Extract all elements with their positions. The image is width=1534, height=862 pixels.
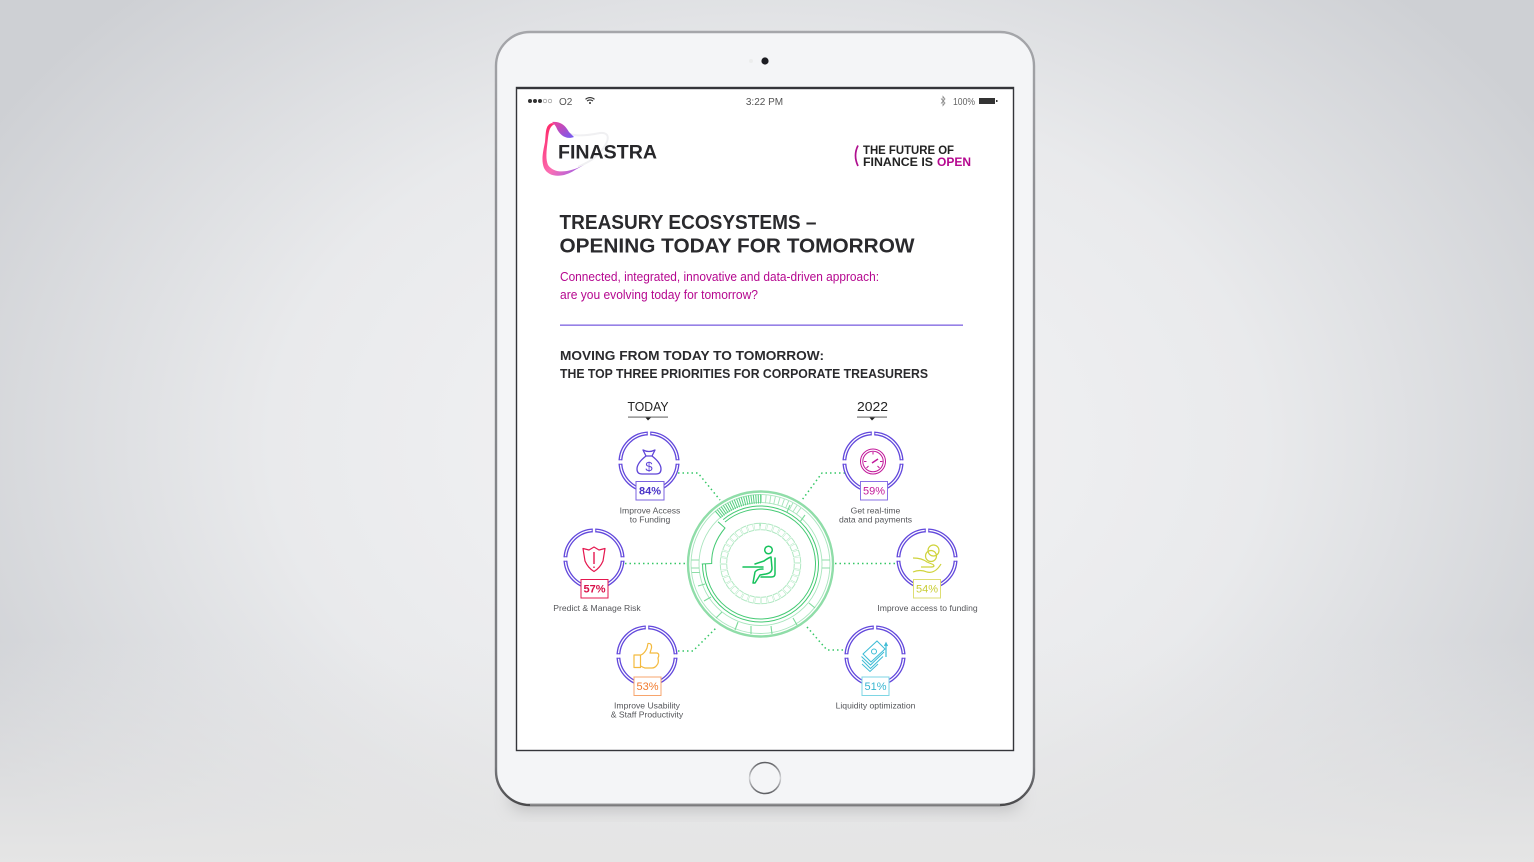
icon: seated person (743, 546, 775, 583)
percent box 54%: 54% (916, 584, 938, 596)
column heading: 2022: 2022 (857, 399, 888, 414)
icon: money bag: $ (645, 459, 653, 474)
column heading: 2022 (857, 399, 888, 420)
label: Predict & Manage Risk (553, 603, 641, 613)
status bar: 100% (953, 97, 975, 108)
home button (750, 762, 780, 794)
front camera (749, 57, 769, 65)
item: liquidity optimization (836, 624, 916, 710)
double inner ring (702, 506, 819, 622)
band ticks (698, 505, 815, 634)
column heading: today: TODAY (628, 399, 669, 414)
status bar: 3:22 PM (746, 97, 783, 108)
label: Improve Access (620, 506, 680, 516)
label (620, 506, 680, 524)
label: Improve Usability (614, 700, 681, 710)
central dial (688, 492, 833, 636)
subtitle (560, 269, 879, 302)
tagline: FINANCE IS (863, 157, 933, 169)
subtitle: Connected, integrated, innovative and data-driven approach: (560, 269, 879, 284)
tablet body (496, 32, 1034, 805)
label: Liquidity optimization (836, 700, 916, 710)
subtitle: are you evolving today for tomorrow? (560, 287, 758, 302)
label: to Funding (630, 514, 671, 524)
title: TREASURY ECOSYSTEMS – (560, 211, 816, 234)
screen (516, 88, 1014, 750)
icon: thumbs up (634, 643, 659, 668)
status bar (528, 96, 998, 108)
percent box 84%: 84% (639, 486, 661, 498)
tagline (856, 145, 971, 169)
label: Get real-time (851, 506, 901, 516)
item: predict and manage risk (553, 527, 641, 613)
section heading: MOVING FROM TODAY TO TOMORROW: (560, 348, 824, 363)
title (560, 211, 915, 258)
percent box 53%: 53% (636, 681, 659, 693)
tagline: THE FUTURE OF (863, 145, 954, 157)
item: real-time data and payments (839, 430, 912, 524)
icon: hand with coins (913, 545, 941, 572)
bead ring (724, 526, 798, 600)
status bar: O2 (559, 97, 573, 108)
column heading: today (628, 399, 669, 420)
icon: gauge (860, 449, 886, 474)
percent box 59%: 59% (863, 486, 885, 498)
band segment ends (692, 560, 830, 572)
hatched band (718, 499, 761, 515)
logo: Finastra: FINASTRA (558, 142, 657, 164)
label: Improve access to funding (877, 603, 978, 613)
label: & Staff Productivity (611, 710, 684, 720)
percent box 51%: 51% (864, 681, 887, 693)
item: improve access to funding (2022) (877, 527, 978, 613)
dotted connectors (625, 473, 897, 651)
title: OPENING TODAY FOR TOMORROW (560, 234, 915, 258)
icon: shield (583, 547, 605, 572)
label (839, 506, 912, 524)
label (611, 700, 684, 720)
section heading (560, 348, 928, 381)
icon: banknotes (862, 641, 888, 672)
logo: Finastra (542, 122, 657, 176)
divider (560, 324, 963, 326)
tagline: OPEN (937, 157, 971, 169)
percent box 57%: 57% (583, 584, 606, 596)
screen top bezel line (516, 87, 1014, 89)
section heading: THE TOP THREE PRIORITIES FOR CORPORATE TREASURERS (560, 366, 928, 381)
label: data and payments (839, 514, 912, 524)
tablet shadow (510, 786, 1020, 810)
left step outline (702, 522, 725, 564)
item: improve usability and staff productivity (611, 624, 684, 720)
item: improve access to funding (today) (617, 430, 681, 524)
white band gaps (823, 562, 829, 566)
